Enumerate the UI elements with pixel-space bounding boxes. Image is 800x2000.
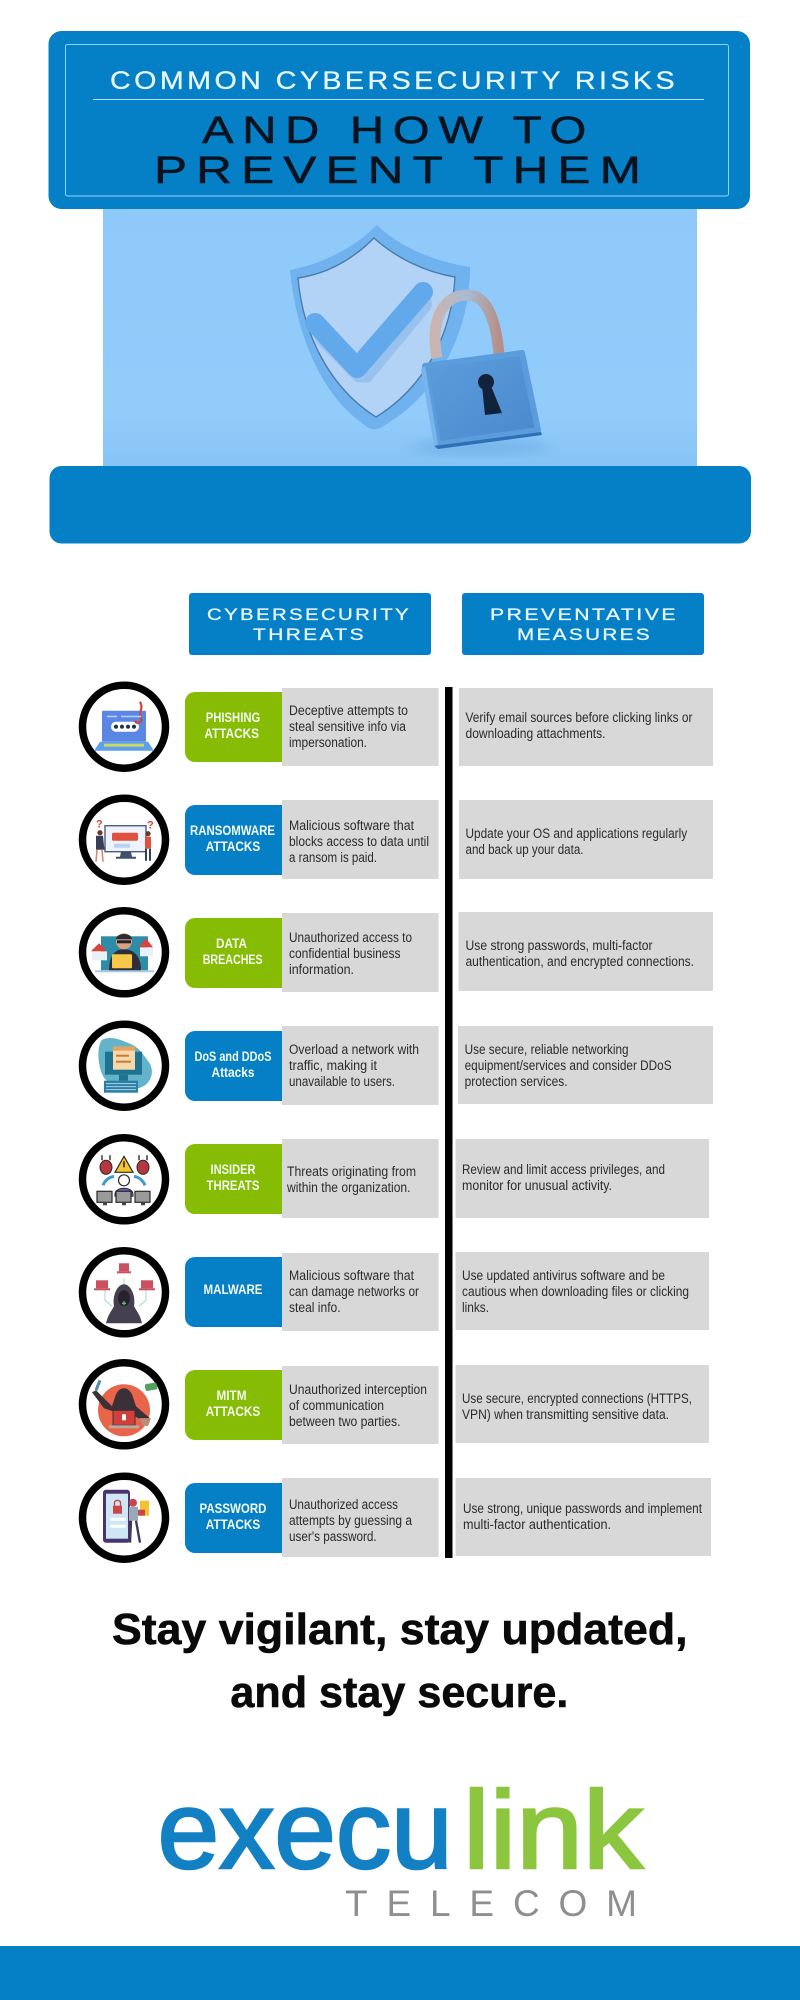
preventative measure: Use strong, unique passwords and implement bbox=[463, 1501, 702, 1516]
logo: execulink telecom bbox=[158, 1769, 644, 1924]
threat description: user's password. bbox=[289, 1529, 377, 1544]
icon: padlock bbox=[421, 295, 542, 449]
icon: phone with lock and thief bbox=[82, 1476, 166, 1559]
threat description: a ransom is paid. bbox=[289, 850, 377, 865]
preventative measure: and back up your data. bbox=[466, 842, 584, 857]
label: mitm attacks: MITM bbox=[216, 1388, 246, 1403]
column divider bbox=[445, 687, 452, 1558]
title line 3: PREVENT THEM bbox=[154, 150, 650, 192]
threat description: blocks access to data until bbox=[289, 834, 429, 849]
label: malware bbox=[185, 1257, 282, 1327]
label: mitm attacks: ATTACKS bbox=[206, 1404, 260, 1419]
preventative measure: Use secure, reliable networking bbox=[465, 1042, 629, 1057]
label: ransomware attacks bbox=[185, 805, 282, 875]
title line 1: COMMON CYBERSECURITY RISKS bbox=[110, 67, 678, 95]
column heading: cybersecurity threats: THREATS bbox=[253, 625, 366, 644]
threat description bbox=[282, 1253, 439, 1331]
preventative measure: cautious when downloading files or clicking bbox=[462, 1284, 689, 1299]
label: data breaches: BREACHES bbox=[203, 952, 263, 967]
icon: hooded hacker with laptops bbox=[82, 1251, 166, 1334]
preventative measure: downloading attachments. bbox=[466, 726, 606, 741]
row: dos and ddos attacks bbox=[82, 1024, 713, 1107]
column heading: cybersecurity threats bbox=[189, 593, 431, 655]
label: malware: MALWARE bbox=[204, 1282, 262, 1297]
icon: ransomware screen with two people: ? bbox=[147, 820, 154, 832]
preventative measure: Verify email sources before clicking links or bbox=[466, 710, 693, 725]
threat description bbox=[282, 1478, 439, 1557]
label: password attacks: ATTACKS bbox=[206, 1517, 260, 1532]
preventative measure bbox=[456, 1365, 709, 1443]
preventative measure: VPN) when transmitting sensitive data. bbox=[462, 1407, 669, 1422]
threat description: information. bbox=[289, 962, 354, 977]
label: data breaches bbox=[185, 918, 282, 988]
threat description: traffic, making it bbox=[289, 1058, 377, 1073]
icon: phishing laptop bbox=[82, 685, 166, 768]
label: dos and ddos attacks bbox=[185, 1031, 282, 1101]
title banner bbox=[48, 31, 750, 209]
preventative measure: equipment/services and consider DDoS bbox=[465, 1058, 672, 1073]
label: data breaches: DATA bbox=[216, 936, 247, 951]
row: ransomware attacks bbox=[82, 798, 713, 881]
label: dos and ddos attacks: Attacks bbox=[212, 1065, 254, 1080]
label: dos and ddos attacks: DoS and DDoS bbox=[194, 1049, 272, 1064]
label: ransomware attacks: ATTACKS bbox=[206, 839, 260, 854]
threat description: Threats originating from bbox=[287, 1164, 416, 1179]
preventative measure bbox=[456, 1139, 709, 1218]
threat description: Overload a network with bbox=[289, 1042, 419, 1057]
icon: thief in laptop bbox=[82, 911, 166, 994]
threat description: steal info. bbox=[289, 1300, 341, 1315]
title line 2: AND HOW TO bbox=[202, 110, 595, 152]
label: insider threats: INSIDER bbox=[210, 1162, 256, 1177]
preventative measure: monitor for unusual activity. bbox=[462, 1178, 612, 1193]
row: phishing attacks bbox=[82, 685, 713, 768]
label: phishing attacks: ATTACKS bbox=[204, 726, 259, 741]
closing message: and stay secure. bbox=[230, 1668, 568, 1717]
preventative measure: authentication, and encrypted connections. bbox=[466, 954, 694, 969]
icon: hacker over laptop bbox=[82, 1363, 166, 1446]
closing message bbox=[112, 1605, 688, 1717]
column heading: preventative measures: PREVENTATIVE bbox=[490, 605, 678, 624]
logo: execulink telecom: execu bbox=[158, 1769, 453, 1892]
blank blue bar bbox=[50, 466, 751, 544]
threat description: Unauthorized access bbox=[289, 1497, 398, 1512]
preventative measure: multi-factor authentication. bbox=[463, 1517, 611, 1532]
threat description bbox=[282, 913, 439, 992]
threat description bbox=[282, 800, 439, 879]
label: password attacks: PASSWORD bbox=[200, 1501, 267, 1516]
threat description: confidential business bbox=[289, 946, 401, 961]
row: malware bbox=[82, 1251, 709, 1334]
row: data breaches bbox=[82, 911, 713, 994]
icon: insider with bugs and monitors bbox=[82, 1138, 166, 1221]
label: phishing attacks bbox=[185, 692, 282, 762]
closing message: Stay vigilant, stay updated, bbox=[112, 1605, 688, 1654]
threat description: Unauthorized interception bbox=[289, 1382, 427, 1397]
row: insider threats bbox=[82, 1138, 709, 1221]
footer bar bbox=[0, 1946, 800, 2000]
label: mitm attacks bbox=[185, 1370, 282, 1440]
preventative measure bbox=[459, 800, 713, 879]
icon: ransomware screen with two people bbox=[82, 798, 166, 881]
threat description bbox=[282, 1026, 439, 1105]
label: insider threats bbox=[185, 1144, 282, 1214]
preventative measure bbox=[458, 912, 713, 991]
threat description bbox=[282, 1366, 439, 1444]
label: ransomware attacks: RANSOMWARE bbox=[190, 823, 275, 838]
label: phishing attacks: PHISHING bbox=[206, 710, 260, 725]
column heading: preventative measures: MEASURES bbox=[517, 625, 652, 644]
threat description bbox=[282, 1139, 439, 1218]
preventative measure bbox=[458, 1026, 713, 1104]
preventative measure: Use strong passwords, multi-factor bbox=[466, 938, 653, 953]
row: mitm attacks bbox=[82, 1363, 709, 1446]
label: insider threats: THREATS bbox=[206, 1178, 260, 1193]
threat description: steal sensitive info via bbox=[289, 719, 406, 734]
threat description: Unauthorized access to bbox=[289, 930, 412, 945]
preventative measure: links. bbox=[462, 1300, 489, 1315]
preventative measure bbox=[456, 1478, 711, 1556]
preventative measure: Update your OS and applications regularly bbox=[466, 826, 687, 841]
threat description: attempts by guessing a bbox=[289, 1513, 412, 1528]
preventative measure: protection services. bbox=[465, 1074, 568, 1089]
threat description: of communication bbox=[289, 1398, 384, 1413]
preventative measure: Review and limit access privileges, and bbox=[462, 1162, 665, 1177]
threat description: Deceptive attempts to bbox=[289, 703, 408, 718]
preventative measure: Use updated antivirus software and be bbox=[462, 1268, 665, 1283]
threat description: between two parties. bbox=[289, 1414, 400, 1429]
preventative measure bbox=[456, 1252, 709, 1330]
hero image: shield and padlock bbox=[103, 205, 697, 467]
icon: shield with check mark bbox=[290, 225, 550, 454]
threat description: unavailable to users. bbox=[289, 1074, 395, 1089]
label: password attacks bbox=[185, 1483, 282, 1553]
threat description: Malicious software that bbox=[289, 1268, 414, 1283]
row: password attacks bbox=[82, 1476, 711, 1559]
threat description: within the organization. bbox=[286, 1180, 410, 1195]
icon: ransomware screen with two people: ? bbox=[96, 819, 103, 831]
threat description: can damage networks or bbox=[289, 1284, 419, 1299]
column heading: preventative measures bbox=[462, 593, 704, 655]
logo: execulink telecom: link bbox=[463, 1769, 644, 1892]
icon: overloaded computer bbox=[82, 1024, 166, 1107]
logo: execulink telecom: TELECOM bbox=[345, 1883, 637, 1924]
preventative measure bbox=[459, 688, 713, 766]
threat description bbox=[282, 688, 439, 766]
threat description: Malicious software that bbox=[289, 818, 414, 833]
threat description: impersonation. bbox=[289, 735, 367, 750]
column heading: cybersecurity threats: CYBERSECURITY bbox=[207, 605, 411, 624]
preventative measure: Use secure, encrypted connections (HTTPS, bbox=[462, 1391, 692, 1406]
